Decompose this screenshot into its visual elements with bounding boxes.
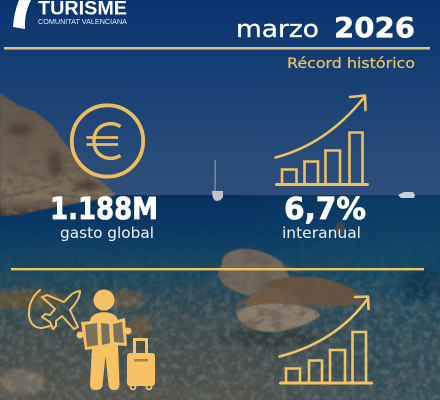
logo: Turisme Comunitat Valenciana: COMUNITAT VALENCIANA [38,19,127,26]
figure: 1.188M: 1.188M [50,192,158,227]
icon: suitcase [127,340,155,390]
panel: tourist [29,290,155,390]
figure: 6,7%: 6,7% [284,192,366,227]
subtitle: record historico: Récord histórico [287,56,415,72]
label: interanual: interanual [282,224,361,242]
icon: airplane [29,290,80,329]
icon: traveller reading map [76,290,132,390]
icon: rising bar chart [276,96,368,184]
label: gasto global: gasto global [60,224,154,242]
icon: lower rising bar chart [280,296,372,383]
title: marzo 2026: 2026 [334,11,415,44]
panel: global spending [50,105,158,242]
logo: Turisme Comunitat Valenciana [13,0,127,29]
lower divider [11,268,424,270]
panel: year on year growth [276,96,368,242]
top divider [4,47,430,50]
icon: euro coin [72,105,143,177]
title: marzo 2026: marzo [236,15,319,43]
title: marzo 2026 [236,11,415,44]
